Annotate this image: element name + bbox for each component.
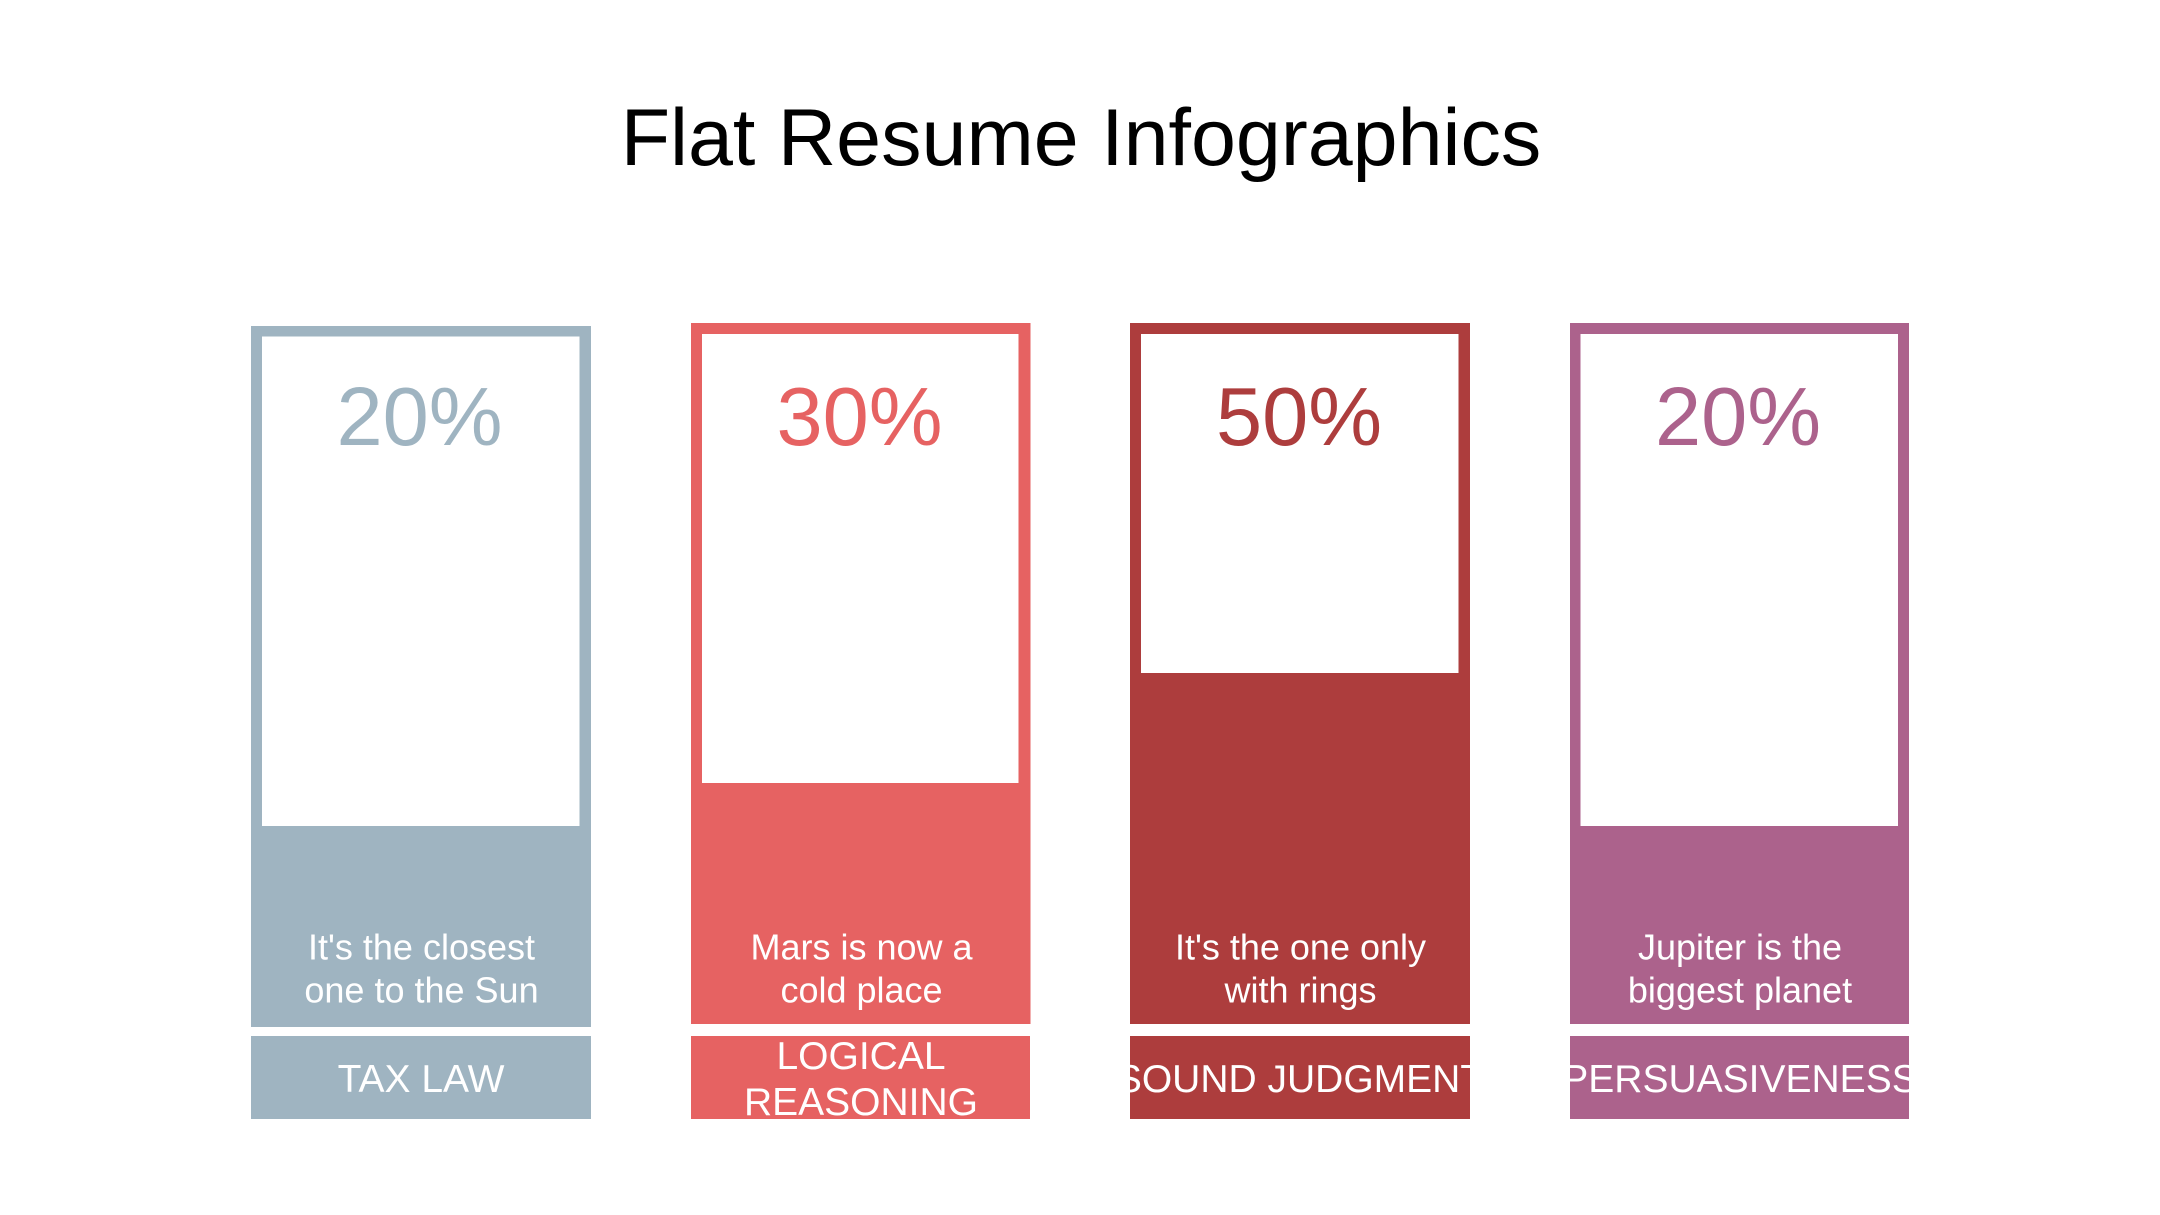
skill label: [1562, 1036, 1918, 1119]
percentage: 50%: 50%: [1216, 370, 1382, 463]
description: cold place: [780, 970, 943, 1010]
description: biggest planet: [1628, 970, 1852, 1010]
percentage: 20%: 20%: [336, 370, 503, 463]
skill label: TAX LAW: [338, 1058, 505, 1101]
description: Jupiter is the: [1638, 926, 1842, 968]
percentage: 20%: 20%: [1655, 370, 1821, 463]
gauge frame and 30% fill: [691, 323, 1030, 1024]
panel: logical reasoning: [691, 323, 1030, 1124]
skill label: [691, 1035, 1030, 1124]
panel: sound judgment: [1116, 323, 1484, 1119]
skill label: REASONING: [744, 1081, 978, 1124]
gauge frame and 50% fill: [1130, 323, 1470, 1024]
description: It's the closest: [308, 926, 535, 968]
gauge frame and 20% fill: [1570, 323, 1909, 1024]
description: with rings: [1223, 970, 1377, 1010]
skill label: SOUND JUDGMENT: [1116, 1058, 1484, 1101]
skill label: PERSUASIVENESS: [1562, 1058, 1918, 1101]
title: Flat Resume Infographics: [621, 93, 1541, 183]
description: It's the one only: [1175, 926, 1426, 968]
description: Mars is now a: [750, 926, 974, 968]
panel: persuasiveness: [1562, 323, 1918, 1119]
panel: tax law: [251, 326, 591, 1119]
skill label: [1116, 1036, 1484, 1119]
description: one to the Sun: [304, 970, 539, 1010]
gauge frame and 20% fill: [251, 326, 591, 1027]
skill label: LOGICAL: [776, 1035, 946, 1078]
percentage: 30%: 30%: [776, 370, 943, 463]
skill label: [251, 1036, 591, 1119]
